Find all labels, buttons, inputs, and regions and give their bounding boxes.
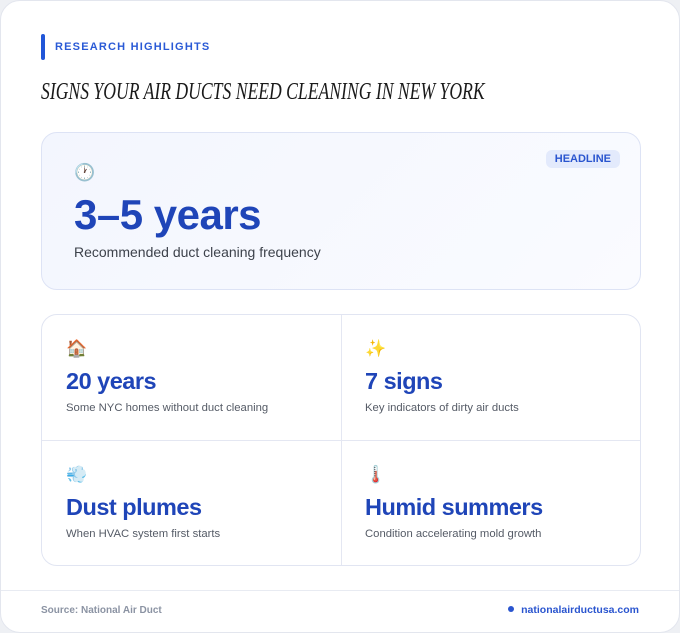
stat: dust plumes — [66, 465, 220, 540]
stat: 20 years: 🏠 — [66, 339, 87, 359]
stat: 20 years — [66, 339, 268, 414]
stat: 7 signs: 7 signs — [365, 368, 442, 394]
badge: headline — [546, 150, 620, 168]
stat: 20 years: Some NYC homes without duct cleaning — [66, 402, 268, 414]
stat: 7 signs: ✨ — [365, 339, 386, 359]
stat: 20 years: 20 years — [66, 368, 156, 394]
title: SIGNS YOUR AIR DUCTS NEED CLEANING IN NEW YORK — [41, 79, 485, 105]
panel: headline stat — [41, 132, 641, 290]
headline description: Recommended duct cleaning frequency — [74, 244, 321, 260]
footer source: Source: National Air Duct — [41, 605, 162, 616]
stat: dust plumes: When HVAC system first starts — [66, 528, 220, 540]
eyebrow label — [41, 34, 210, 60]
stat: humid summers: Condition accelerating mold growth — [365, 528, 541, 540]
stat: dust plumes: Dust plumes — [66, 494, 202, 520]
stat: humid summers — [365, 464, 543, 540]
badge: headline: HEADLINE — [555, 153, 611, 165]
stat: 7 signs: Key indicators of dirty air ducts — [365, 402, 519, 414]
footer link: nationalairductusa.com — [521, 604, 639, 616]
stat: dust plumes: 💨 — [66, 465, 87, 485]
stat: 7 signs — [365, 339, 519, 414]
icon: clock: 🕐 — [74, 163, 95, 183]
panel: stats grid — [41, 314, 641, 566]
stat: humid summers: Humid summers — [365, 494, 543, 520]
headline value: 3–5 years — [74, 191, 261, 238]
stat: humid summers: 🌡️ — [365, 465, 386, 485]
eyebrow label: RESEARCH HIGHLIGHTS — [55, 41, 210, 53]
